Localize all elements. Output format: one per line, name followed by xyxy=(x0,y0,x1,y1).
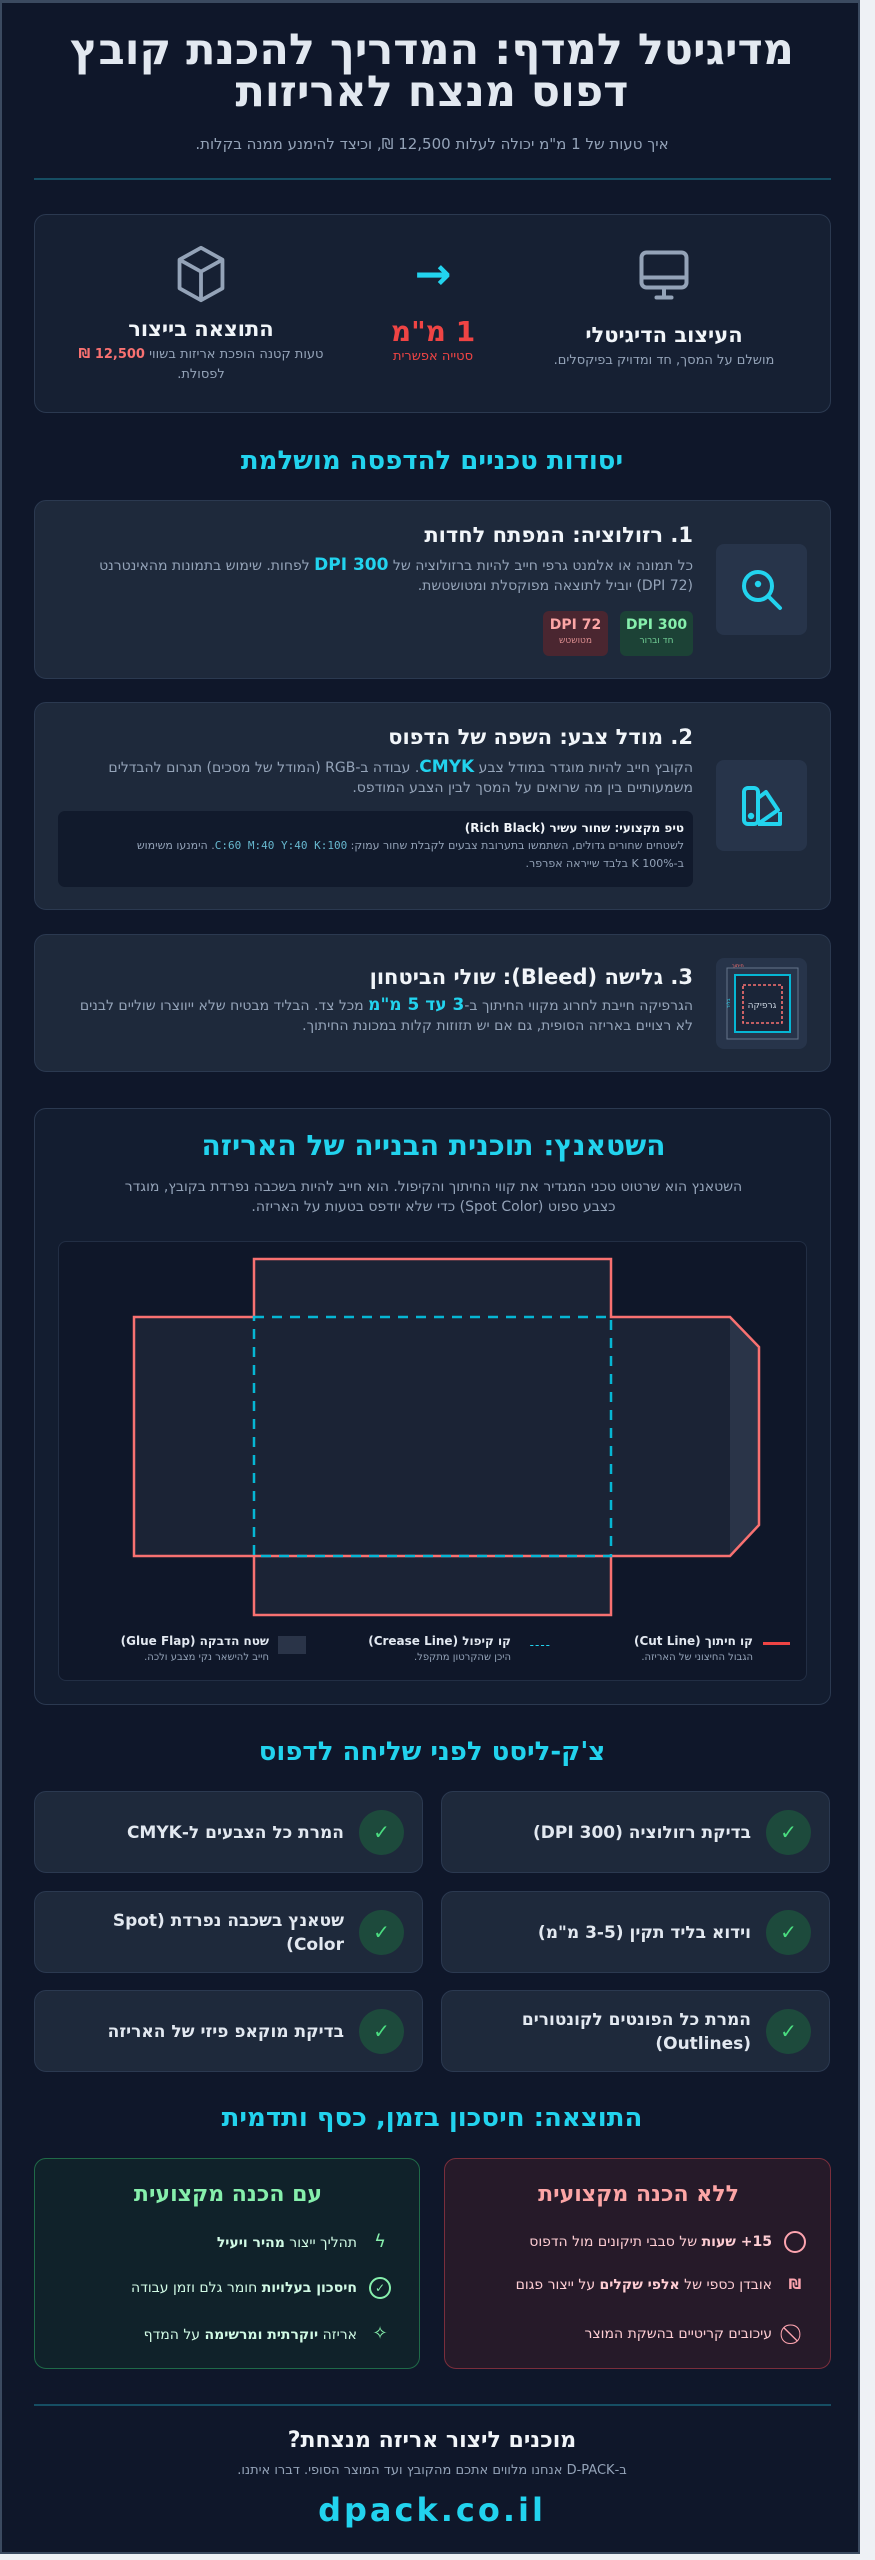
legend: crease line xyxy=(368,1634,551,1663)
hero: 1mm deviation arrow: → xyxy=(415,249,451,300)
card 1 text: 1. רזולוציה: המפתח לחדות xyxy=(424,523,693,547)
item: fast: תהליך ייצור מהיר ויעיל xyxy=(217,2235,357,2251)
hero: production result xyxy=(79,246,323,382)
item: fast: ϟ xyxy=(374,2231,386,2252)
CTA subtitle: ב-D-PACK אנחנו מלווים אתכם מהקובץ ועד המוצר הסופי. דברו איתנו. xyxy=(237,2463,627,2478)
hero panel: digital vs production xyxy=(34,214,831,413)
dieline diagram xyxy=(58,1241,807,1681)
card 2 text xyxy=(108,725,693,796)
item: savings xyxy=(131,2277,391,2299)
legend: cut line: הגבול החיצוני של האריזה. xyxy=(641,1652,753,1663)
hero: production result: טעות קטנה הופכת אריזות בשווי 12,500 ₪ לפסולת. xyxy=(79,347,323,382)
icon: magnifier xyxy=(716,544,807,635)
check: resolution xyxy=(441,1791,830,1873)
panel: dieline xyxy=(34,1108,831,1705)
subtitle: איך טעות של 1 מ"מ יכולה לעלות 12,500 ₪, וכיצד להימנע ממנה בקלות. xyxy=(195,135,669,153)
check: outlines: ✓ xyxy=(780,2019,797,2043)
legend: crease line: היכן שהקרטון מתקפל. xyxy=(414,1652,511,1663)
badges: 300 vs 72 DPI: מטושטש xyxy=(559,636,592,646)
card 1 text: כל תמונה או אלמנט גרפי חייב להיות ברזולוציה של DPI 300 לפחות. שימוש בתמונות מהאינטרנט (DPI 72) יוביל לתוצאה מפוקסלת ומטושטשת. xyxy=(99,555,693,594)
legend: cut line xyxy=(634,1634,790,1663)
dieline description: השטאנץ הוא שרטוט טכני המגדיר את קווי החיתוך והקיפול. הוא חייב להיות בשכבה נפרדת בקובץ, מוגדר כצבע ספוט (Spot Color) כדי שלא יודפס בטעות על האריזה. xyxy=(125,1179,742,1215)
panel: without professional prep xyxy=(444,2158,831,2369)
icon: swatches xyxy=(716,760,807,851)
icon: bleed diagram: גרפיקה xyxy=(748,1001,777,1011)
icon: bleed diagram xyxy=(716,958,807,1049)
hero: digital design: העיצוב הדיגיטלי xyxy=(585,323,743,347)
card 3 text: הגרפיקה חייבת לחרוג מקווי החיתוך ב-3 עד 5 מ"מ מכל צד. הבליד מבטיח שלא ייווצרו שוליים לבנים לא רצויים באריזה הסופית, גם אם יש תזוזות קלות במכונת החיתוך. xyxy=(80,995,693,1034)
check: CMYK: המרת כל הצבעים ל-CMYK xyxy=(127,1823,344,1843)
check: dieline spot xyxy=(34,1891,423,1973)
check: outlines: המרת כל הפונטים לקונטורים (Outlines) xyxy=(522,2010,751,2054)
checklist grid xyxy=(34,1791,830,2072)
card 3: bleed xyxy=(34,934,831,1072)
check: dieline spot: ✓ xyxy=(373,1920,390,1944)
icon: bleed diagram: חיתוך xyxy=(732,963,744,969)
icon: box xyxy=(178,246,224,302)
panel: without professional prep: ללא הכנה מקצועית xyxy=(538,2182,739,2207)
title xyxy=(70,25,794,117)
CTA title: מוכנים ליצור אריזה מנצחת? xyxy=(288,2428,576,2453)
item: fast xyxy=(217,2231,386,2252)
legend: glue flap: שטח הדבקה (Glue Flap) xyxy=(121,1634,269,1648)
hero: 1mm deviation arrow: 1 מ"מ xyxy=(391,315,475,348)
hero: production result: התוצאה בייצור xyxy=(128,317,274,341)
item: hours: 15+ שעות של סבבי תיקונים מול הדפוס xyxy=(529,2234,772,2250)
dieline diagram: ---- xyxy=(530,1638,551,1652)
section heading: result: התוצאה: חיסכון בזמן, כסף ותדמית xyxy=(222,2103,642,2133)
card 2 text: הקובץ חייב להיות מוגדר במודל צבע CMYK. עבודה ב-RGB (המודל של מסכים) תגרום להבדלים משמעותיים בין מה שרואים על המסך לבין הצבע המודפס. xyxy=(108,757,693,796)
item: money: אובדן כספי של אלפי שקלים על ייצור פגום xyxy=(516,2277,772,2293)
section heading: checklist: צ'ק-ליסט לפני שליחה לדפוס xyxy=(259,1737,605,1767)
icon: monitor xyxy=(640,250,688,300)
check: resolution: ✓ xyxy=(780,1820,797,1844)
item: savings: חיסכון בעלויות חומר גלם וזמן עבודה xyxy=(131,2280,357,2296)
card 3 text xyxy=(80,965,693,1034)
title: מדיגיטל למדף: המדריך להכנת קובץ xyxy=(70,25,794,75)
card 2 text: 2. מודל צבע: השפה של הדפוס xyxy=(388,725,693,749)
item: premium xyxy=(144,2323,388,2344)
card 1 text xyxy=(99,523,693,594)
legend: glue flap xyxy=(121,1634,306,1663)
check: mockup xyxy=(34,1990,423,2072)
check: bleed: ✓ xyxy=(780,1920,797,1944)
check: mockup: בדיקת מוקאפ פיזי של האריזה xyxy=(108,2022,344,2042)
icon: bleed diagram: בליד xyxy=(726,998,732,1008)
check: resolution: בדיקת רזולוציה (300 DPI) xyxy=(533,1823,751,1843)
panel: with professional prep: עם הכנה מקצועית xyxy=(134,2182,322,2207)
panel: with professional prep xyxy=(34,2158,420,2369)
CTA url: dpack.co.il xyxy=(318,2491,546,2529)
badges: 300 vs 72 DPI: DPI 72 xyxy=(550,617,601,633)
item: premium: ✧ xyxy=(372,2323,388,2344)
hero: digital design xyxy=(554,250,774,368)
badges: 300 vs 72 DPI xyxy=(543,611,693,656)
check: CMYK xyxy=(34,1791,423,1873)
card 1: resolution xyxy=(34,500,831,679)
tip box: rich black xyxy=(58,811,693,887)
tip box: rich black: לשטחים שחורים גדולים, השתמשו בתערובת צבעים לקבלת שחור עמוק: C:60 M:40 Y:40 K:100. הימנעו משימוש ב-100% K בלבד שייראה אפרפר. xyxy=(137,839,684,870)
legend: glue flap: חייב להישאר נקי מצבע ולכה. xyxy=(144,1652,269,1663)
item: hours xyxy=(529,2231,806,2253)
check: bleed xyxy=(441,1891,830,1973)
check: CMYK: ✓ xyxy=(373,1820,390,1844)
check: dieline spot: שטאנץ בשכבה נפרדת (Spot Color) xyxy=(113,1911,344,1955)
legend: cut line: קו חיתוך (Cut Line) xyxy=(634,1634,753,1648)
check: bleed: וידוא בליד תקין (3-5 מ"מ) xyxy=(538,1923,751,1943)
title: דפוס מנצח לאריזות xyxy=(236,67,628,117)
hero: 1mm deviation arrow: סטייה אפשרית xyxy=(393,349,473,364)
check: mockup: ✓ xyxy=(373,2019,390,2043)
hero: digital design: מושלם על המסך, חד ומדויק בפיקסלים. xyxy=(554,353,774,368)
card 2: color model xyxy=(34,702,831,910)
hero: 1mm deviation arrow xyxy=(391,249,475,364)
tip box: rich black: טיפ מקצועי: שחור עשיר (Rich Black) xyxy=(465,821,684,835)
check: outlines xyxy=(441,1990,830,2072)
item: delays: עיכובים קריטיים בהשקת המוצר xyxy=(584,2326,772,2342)
item: premium: אריזה יוקרתית ומרשימה על המדף xyxy=(144,2327,357,2343)
item: money: ₪ xyxy=(789,2277,801,2293)
dieline heading: השטאנץ: תוכנית הבנייה של האריזה xyxy=(202,1129,665,1162)
card 3 text: 3. גלישה (Bleed): שולי הביטחון xyxy=(370,965,693,989)
badges: 300 vs 72 DPI: חד וברור xyxy=(640,636,673,646)
section heading: technical foundations: יסודות טכניים להדפסה מושלמת xyxy=(241,446,623,476)
badges: 300 vs 72 DPI: DPI 300 xyxy=(626,617,687,633)
item: savings: ✓ xyxy=(375,2281,385,2295)
legend: crease line: קו קיפול (Crease Line) xyxy=(368,1634,511,1648)
